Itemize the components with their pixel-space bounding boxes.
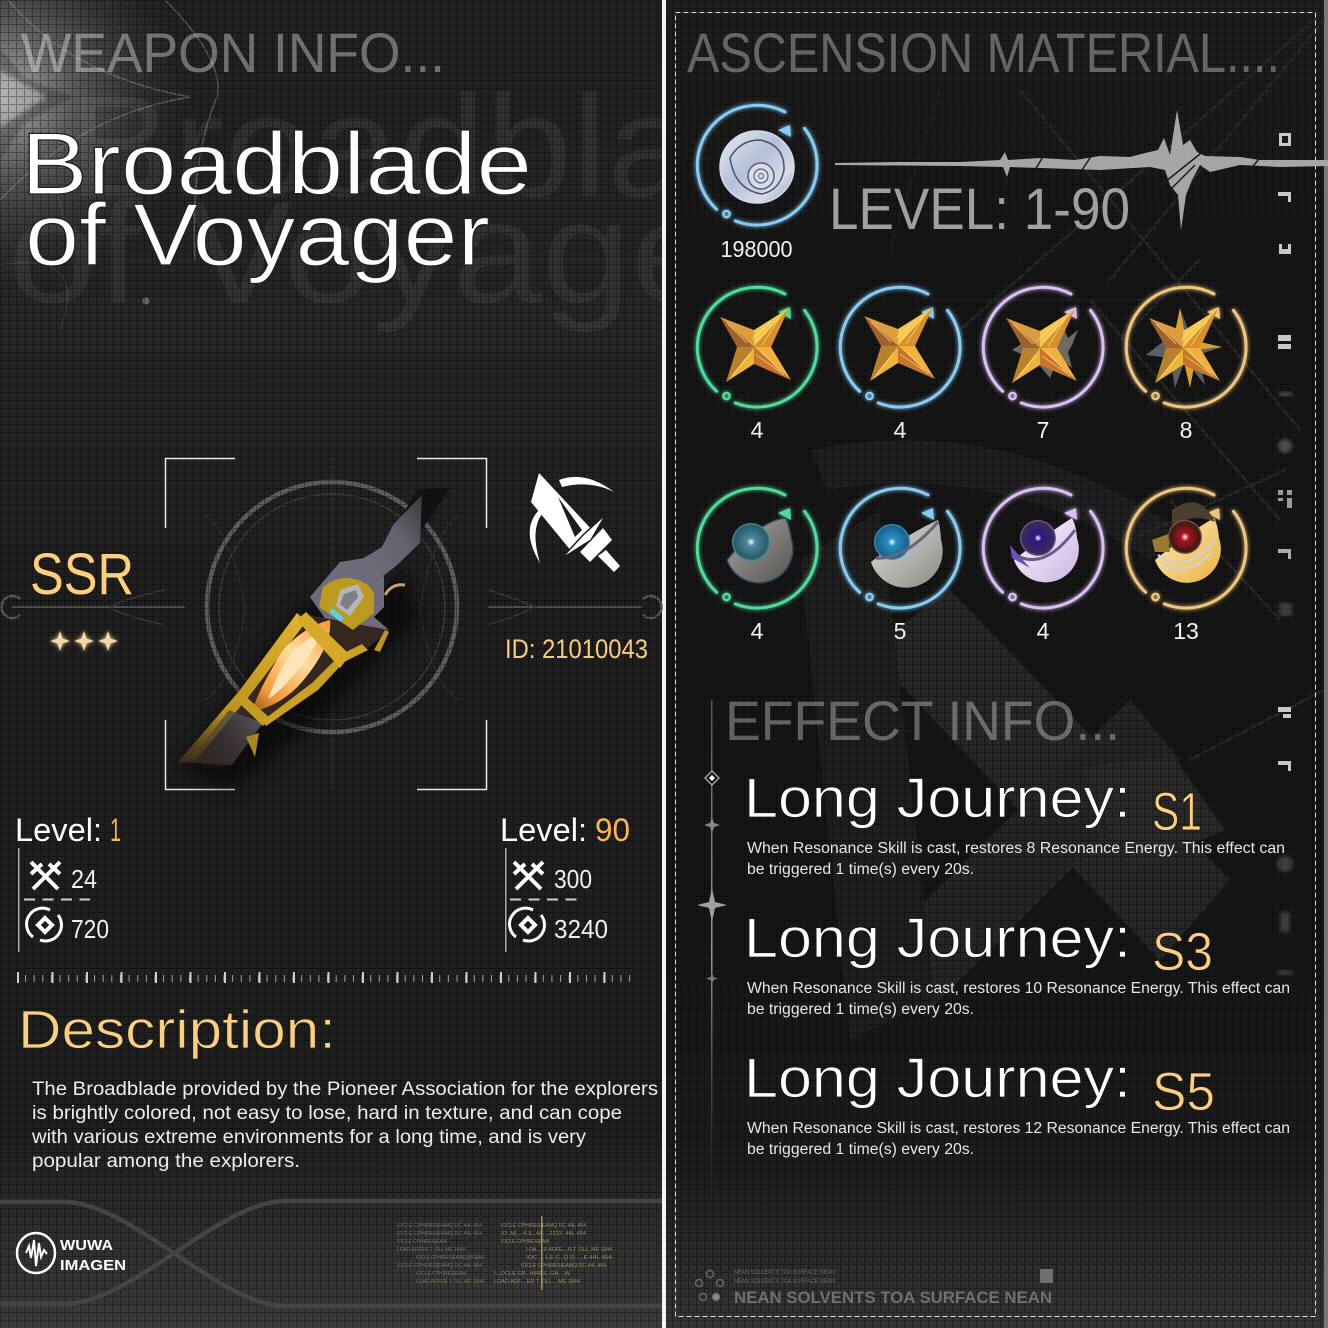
panel: weapon info: [0, 0, 868, 1328]
material: green star: 4: [751, 417, 764, 443]
material row: stars: [697, 287, 1246, 443]
material: shell credit: [697, 105, 817, 262]
effect: rank 1: [744, 766, 1285, 878]
material: gold orb: 13: [1173, 618, 1199, 644]
material: blue orb: 5: [894, 618, 906, 644]
brand name: WUWA: [60, 1237, 113, 1254]
ghost title: of Voyager: [8, 171, 773, 333]
brand name: [60, 1237, 126, 1274]
icon: substat ring: [510, 908, 544, 941]
icon: attack swords: [514, 862, 543, 889]
level range: LEVEL: 1-90: [829, 177, 1130, 242]
effect: rank 1: S1: [1152, 782, 1202, 842]
stats: level 90: [500, 812, 630, 952]
micro code text: IO..M|....4.3...4A....2222. 44L 454: [501, 1231, 586, 1237]
stats: level 90: 300: [554, 864, 592, 894]
effect: rank 3: [744, 906, 1290, 1018]
footer stamp: NEAN SOLVENTS TOA SURFACE NEAN: [734, 1269, 835, 1276]
viewfinder brackets: [166, 458, 486, 790]
description text: is brightly colored, not easy to lose, hard in texture, and can cope: [32, 1103, 622, 1124]
icon: wuwa imagen logo: [17, 1233, 55, 1273]
background emblem: [800, 15, 1324, 1040]
rarity label: SSR: [30, 542, 134, 607]
material: gold orb: [1126, 488, 1246, 644]
material: purple orb: 4: [1037, 618, 1050, 644]
micro code text: IOCLE CPH|RES|EAMQ DC 44L 454: [501, 1223, 586, 1229]
material: gold star: [1126, 287, 1246, 443]
effect: rank 5: When Resonance Skill is cast, restores 12 Resonance Energy. This effect can: [747, 1120, 1290, 1137]
stats: level 90: 3240: [554, 914, 608, 944]
micro code text: [397, 1223, 612, 1285]
stats: level 1: 24: [71, 864, 97, 894]
material: blue star: 4: [894, 417, 907, 443]
material: blue star: [840, 287, 960, 443]
description text: popular among the explorers.: [32, 1151, 300, 1172]
weapon id: ID: 21010043: [505, 634, 648, 664]
effect: rank 1: be triggered 1 time(s) every 20s.: [747, 861, 974, 878]
ghost title: [8, 65, 868, 333]
description text: [31, 1079, 658, 1172]
effect: rank 1: Long Journey:: [744, 766, 1131, 829]
description text: The Broadblade provided by the Pioneer Association for the explorers: [32, 1079, 658, 1100]
material row: orbs: [697, 488, 1246, 644]
micro code text: IOCLE CPH|RES|EAMQ DC 44L 454: [521, 1263, 606, 1269]
micro code text: LOA...LD ADFE....R T :DLL..ME 1844: [526, 1247, 612, 1253]
decorative top-left glow: [0, 0, 240, 330]
material: purple orb: [983, 488, 1103, 644]
heading: description: Description:: [18, 1000, 336, 1060]
effect: rank 5: be triggered 1 time(s) every 20s.: [747, 1141, 974, 1158]
micro code text: IOCLE CPH|RES|EAMQ@IO&64: [416, 1255, 484, 1261]
material: green orb: [697, 488, 817, 644]
material count: 198000: [720, 236, 792, 262]
waveform: [835, 110, 1328, 230]
emblem behind weapon: [1, 458, 662, 790]
effect: rank 5: [744, 1046, 1290, 1158]
effect: rank 5: S5: [1152, 1062, 1215, 1122]
micro code text: LOAD ADF....ER T :DLL....ME 1844: [494, 1279, 580, 1285]
micro code text: LOAD ADFER T: DLL ME 1844: [397, 1247, 465, 1253]
description text: with various extreme environments for a long time, and is very: [31, 1127, 587, 1148]
effect: rank 1: When Resonance Skill is cast, restores 8 Resonance Energy. This effect can: [747, 840, 1285, 857]
dashed frame: [676, 12, 1316, 1316]
heading: effect info: EFFECT INFO...: [725, 689, 1120, 752]
stats: level 90: Level:: [500, 812, 587, 848]
icon: substat ring: [27, 908, 61, 941]
effect: rank 5: Long Journey:: [744, 1046, 1131, 1109]
micro code text: IOC.....LE C..Q.D.....E 44L 454: [526, 1255, 612, 1261]
micro code text: I...OCLE CP...H|RES..GA....W: [494, 1271, 570, 1277]
material: green orb: 4: [751, 618, 764, 644]
weapon title: of Voyager: [25, 185, 490, 284]
micro code text: IOCLE CPH|RES|EAMQ DC 44L 454: [397, 1223, 482, 1229]
stats: level 1: [15, 812, 121, 952]
panel: ascension and effects: [666, 0, 1328, 1328]
stats: level 1: 720: [71, 914, 109, 944]
effect: rank 3: When Resonance Skill is cast, restores 10 Resonance Energy. This effect can: [747, 980, 1290, 997]
effect: rank 3: S3: [1152, 922, 1213, 982]
micro code text: IOCLE CPH|RES|EAMQ DC 44L 454: [397, 1231, 482, 1237]
timeline: [697, 700, 727, 1210]
brand name: IMAGEN: [60, 1257, 126, 1274]
weapon image: [178, 488, 450, 790]
icon: broadblade class: [530, 473, 620, 572]
stats: level 1: Level:: [15, 812, 102, 848]
micro code text: IOCLE CPH|RES|EAM: [416, 1271, 466, 1277]
micro code text: IOCLE CPH|RES|EAM: [397, 1239, 447, 1245]
material: purple star: 7: [1037, 417, 1049, 443]
effect: rank 3: be triggered 1 time(s) every 20s.: [747, 1001, 974, 1018]
micro code text: IOCLE CPH|RES|EAM: [501, 1239, 549, 1245]
rarity stars: [50, 631, 118, 651]
icon: attack swords: [31, 862, 60, 889]
footer stamp: NEAN SOLVENTS TOA SURFACE NEAN: [734, 1288, 1052, 1307]
heading: weapon info: WEAPON INFO...: [21, 21, 445, 84]
weapon title: [21, 114, 532, 284]
material: green star: [697, 287, 817, 443]
stats: level 90: 90: [595, 812, 630, 848]
material: purple star: [983, 287, 1103, 443]
ghost title: Broadblade: [68, 65, 868, 227]
micro code text: LOAD ADFER T: DLL ME 1844: [416, 1279, 484, 1285]
material: blue orb: [840, 488, 960, 644]
effect: rank 3: Long Journey:: [744, 906, 1131, 969]
weapon title: Broadblade: [21, 114, 532, 213]
footer stamp: [696, 1269, 1053, 1307]
stats: level 1: 1: [110, 812, 121, 848]
footer stamp: NEAN SOLVENTS TOA SURFACE NEAN: [734, 1278, 835, 1285]
micro code text: IOCLE CPH|RES|EAMQ DC 44L 454: [397, 1263, 482, 1269]
side decorations: [1277, 133, 1293, 975]
bottom crossing bands: [0, 1201, 662, 1306]
ruler: [17, 978, 636, 979]
material: gold star: 8: [1180, 417, 1192, 443]
